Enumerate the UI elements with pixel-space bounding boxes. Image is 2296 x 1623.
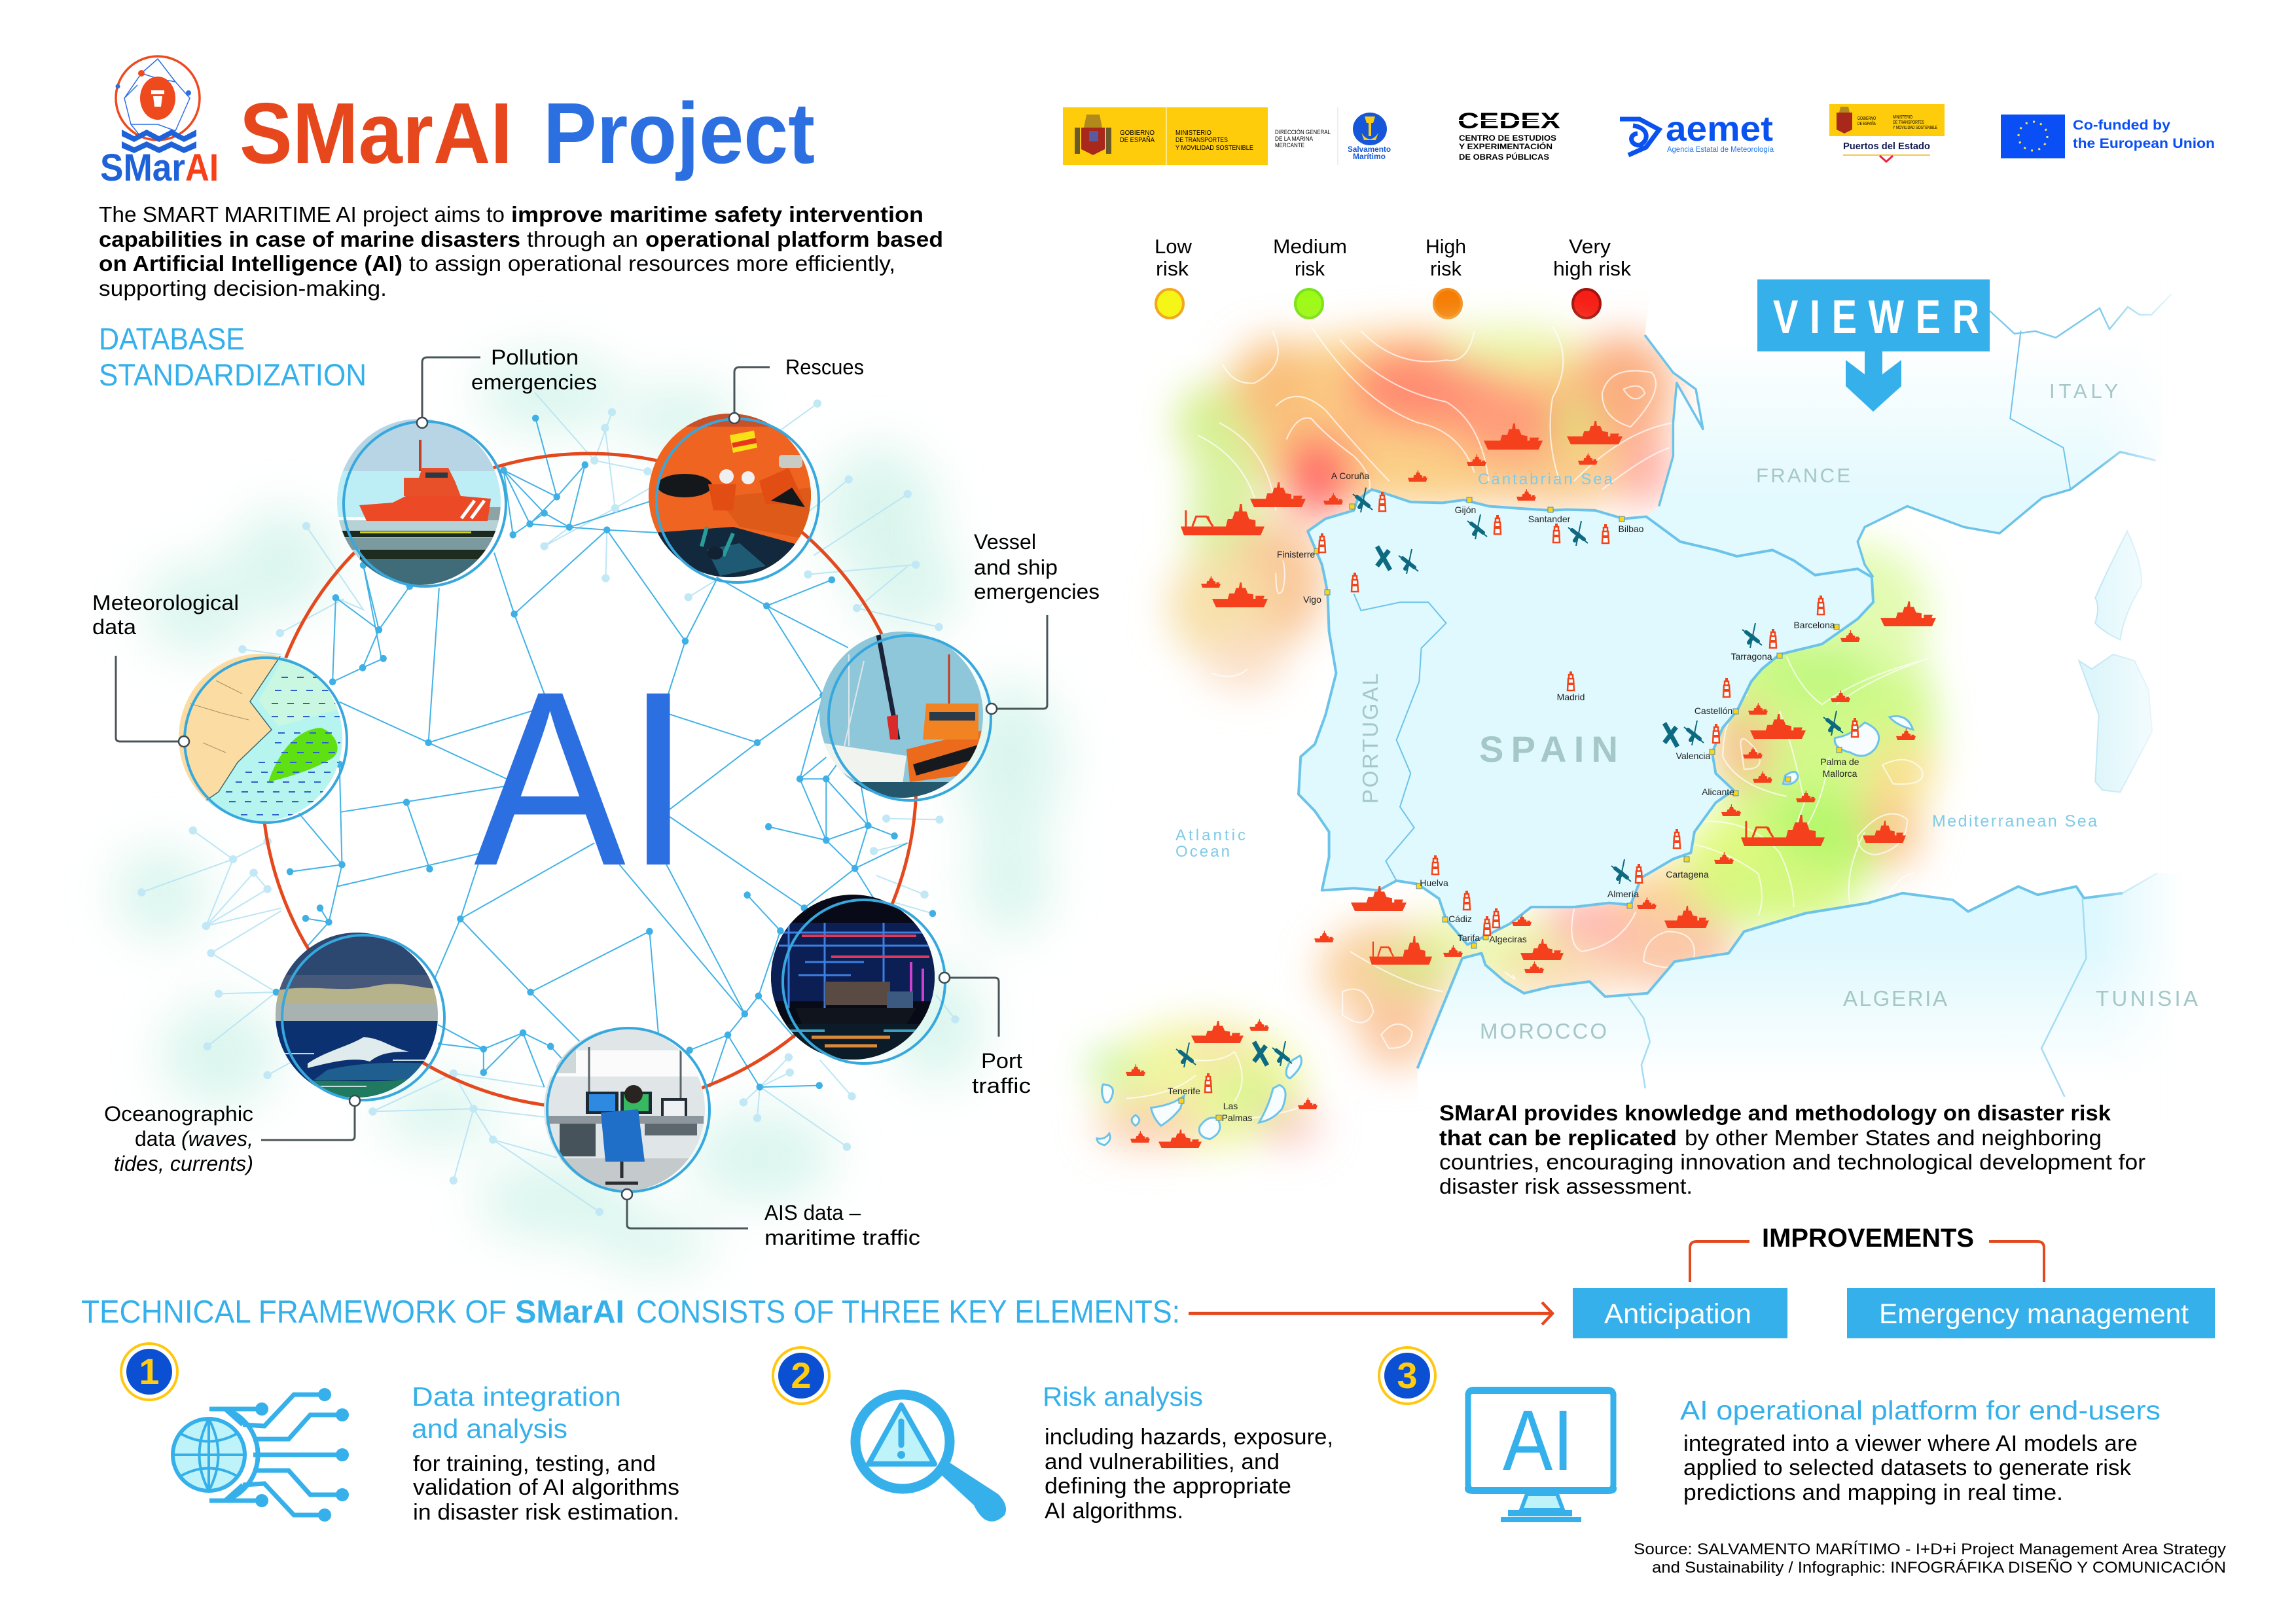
coordination centre towers (1205, 492, 1858, 1092)
badge 2 (773, 1347, 829, 1404)
text: AI operational platform: integrated into a viewer where AI models are (1683, 1431, 2138, 1456)
text: AI operational platform: AI operational platform for end-users (1680, 1395, 2161, 1425)
port markers and labels: Alicante (1702, 787, 1734, 797)
improvements heading with bracket: IMPROVEMENTS (1762, 1224, 1974, 1253)
badge 2: 2 (791, 1355, 812, 1396)
logo: Gobierno de España ministry: DE TRANSPORTES (1175, 137, 1228, 144)
viewer banner with arrow: VIEWER (1773, 291, 1979, 343)
logo: Gobierno de España ministry: MERCANTE (1275, 142, 1304, 149)
sea and country names: ALGERIA (1843, 986, 1947, 1010)
photo: rescues (645, 412, 819, 582)
risk legend: risk (1430, 257, 1462, 280)
logo: Puertos del Estado (1829, 104, 1945, 162)
source note (1634, 1541, 2226, 1577)
badge 1: 1 (139, 1351, 160, 1392)
logo: Gobierno de España ministry: DIRECCIÓN GENERAL (1275, 129, 1331, 135)
port markers and labels: Palma de (1820, 757, 1859, 767)
sea and country names: Atlantic (1175, 827, 1246, 844)
box: anticipation: Anticipation (1604, 1298, 1751, 1330)
heading: database standardization: STANDARDIZATION (99, 357, 367, 392)
leader: rescues: Rescues (785, 355, 864, 379)
text: risk analysis: including hazards, exposure, (1045, 1425, 1333, 1450)
rescue vessels (1126, 421, 1936, 1148)
leader: meteorological data (92, 591, 239, 747)
port markers and labels: A Coruña (1331, 471, 1369, 481)
leader: rescues (729, 355, 864, 423)
port markers and labels: Almería (1607, 889, 1639, 899)
leader: vessel and ship emergencies: emergencies (974, 580, 1100, 603)
sea and country names: FRANCE (1756, 464, 1850, 487)
background glow around network (115, 353, 1063, 1270)
port markers and labels: Tenerife (1168, 1086, 1200, 1096)
helicopters and planes (1176, 488, 1843, 1067)
intro paragraph: supporting decision-making. (99, 276, 387, 300)
leader: vessel and ship emergencies: Vessel (974, 530, 1036, 554)
port markers and labels: Palmas (1222, 1113, 1252, 1123)
text: risk analysis: Risk analysis (1043, 1382, 1203, 1412)
risk legend: High (1426, 235, 1466, 258)
port markers and labels: Las (1223, 1101, 1238, 1111)
framework heading: CONSISTS OF THREE KEY ELEMENTS: (636, 1294, 1180, 1330)
network diagram (137, 393, 960, 1216)
risk legend (1155, 235, 1632, 318)
title: Project (543, 85, 815, 181)
element 3: AI platform (1379, 1347, 2161, 1522)
sea and country names: Mediterranean Sea (1932, 812, 2097, 830)
source note: and Sustainability / Infographic: INFOGRÁFIKA DISEÑO Y COMUNICACIÓN (1652, 1559, 2226, 1577)
logo: EU co-funding: Co-funded by (2073, 118, 2170, 133)
logo: SMarAI emblem (100, 56, 219, 189)
leader: oceanographic data: Oceanographic (104, 1102, 253, 1126)
text: data integration: for training, testing, and (413, 1452, 656, 1476)
icon: magnifier with warning (855, 1395, 1006, 1522)
port markers and labels: Mallorca (1823, 768, 1857, 779)
logo: CEDEX: CEDEX (1458, 109, 1560, 134)
framework heading: SMarAI (515, 1294, 624, 1330)
text: data integration: validation of AI algorithms (413, 1475, 679, 1500)
central AI letters: I (624, 639, 693, 918)
sea and country names (1175, 380, 2198, 1043)
box: emergency management (1847, 1288, 2215, 1338)
photo: port traffic (766, 890, 945, 1067)
framework heading (81, 1294, 1180, 1330)
logo: Gobierno de España ministry: Y MOVILIDAD SOSTENIBLE (1175, 145, 1253, 152)
logo: Puertos del Estado: GOBIERNO (1857, 116, 1876, 121)
logo: SMarAI emblem: SMar (100, 147, 185, 189)
text: data integration: Data integration (412, 1382, 621, 1412)
improvements heading with bracket (1690, 1224, 2044, 1282)
replication paragraph: SMarAI provides knowledge and methodology on disaster risk (1439, 1101, 2111, 1125)
badge 1 (121, 1344, 177, 1400)
port markers and labels: Madrid (1557, 692, 1585, 702)
port markers and labels: Tarragona (1731, 651, 1772, 662)
logo strip (1063, 104, 2215, 165)
logo: CEDEX: DE OBRAS PÚBLICAS (1459, 152, 1549, 162)
text: AI operational platform (1680, 1395, 2161, 1505)
port markers and labels: Santander (1528, 514, 1571, 524)
viewer banner with arrow (1757, 279, 1990, 412)
port markers and labels: Tarifa (1458, 933, 1480, 943)
badge 3: 3 (1397, 1355, 1418, 1396)
logo: Salvamento Marítimo: Salvamento (1348, 145, 1391, 154)
port markers and labels: Finisterre (1277, 549, 1315, 560)
leader: pollution emergencies: Pollution (491, 346, 579, 369)
logo: CEDEX: Y EXPERIMENTACIÓN (1459, 141, 1552, 151)
text: data integration (412, 1382, 679, 1525)
source note: Source: SALVAMENTO MARÍTIMO - I+D+i Project Management Area Strategy (1634, 1541, 2226, 1558)
port markers and labels: Vigo (1303, 594, 1321, 605)
text: data integration: and analysis (412, 1414, 567, 1444)
replication paragraph: disaster risk assessment. (1439, 1174, 1693, 1198)
port markers and labels: Bilbao (1619, 524, 1644, 534)
logo: Puertos del Estado: MINISTERIO (1893, 115, 1912, 120)
box: anticipation (1573, 1288, 1787, 1338)
photo: oceanographic data (272, 929, 448, 1103)
risk heatmap (1088, 327, 1935, 1149)
sea and country names: TUNISIA (2096, 986, 2198, 1010)
logo: SMarAI emblem: AI (185, 147, 219, 189)
replication paragraph: that can be replicated (1439, 1126, 1677, 1150)
logo: EU co-funding (2001, 115, 2215, 158)
icon: globe with circuit lines (173, 1388, 349, 1522)
leader: AIS data: maritime traffic (764, 1226, 920, 1249)
text: risk analysis: AI algorithms. (1045, 1499, 1183, 1524)
sea and country names: Cantabrian Sea (1478, 471, 1613, 488)
orange ring connecting data sources (262, 454, 916, 1108)
risk legend: high risk (1553, 257, 1632, 280)
element 1: data integration (121, 1344, 679, 1525)
badge 3 (1379, 1347, 1435, 1404)
port markers and labels: Cádiz (1448, 914, 1472, 924)
intro paragraph: capabilities in case of marine disasters (99, 227, 520, 251)
photo: vessel and ship emergencies (815, 628, 992, 802)
logo: Salvamento Marítimo (1348, 113, 1391, 161)
text: risk analysis: defining the appropriate (1045, 1474, 1291, 1499)
intro paragraph: The SMART MARITIME AI project aims to (99, 202, 505, 226)
replication paragraph (1439, 1101, 2145, 1198)
risk legend: Medium (1273, 235, 1347, 258)
port markers and labels: Castellón (1695, 705, 1732, 716)
logo: Puertos del Estado: Puertos del Estado (1843, 141, 1930, 152)
intro paragraph: through an (527, 227, 638, 251)
risk legend: risk (1295, 257, 1325, 280)
logo: Gobierno de España ministry: GOBIERNO (1120, 130, 1155, 137)
leader: meteorological data: Meteorological (92, 591, 239, 615)
text: risk analysis (1043, 1382, 1333, 1524)
icon: monitor with AI (1465, 1387, 1617, 1522)
photo: pollution emergencies (334, 416, 511, 592)
leader: vessel and ship emergencies: and ship (974, 556, 1058, 579)
port markers and labels: Gijón (1455, 505, 1476, 515)
logo: AEMET: Agencia Estatal de Meteorología (1667, 145, 1774, 154)
leader: port traffic (939, 972, 1031, 1097)
heading: database standardization: DATABASE (99, 321, 245, 356)
port markers and labels: Valencia (1676, 751, 1711, 761)
logo: Gobierno de España ministry: MINISTERIO (1175, 130, 1211, 137)
replication paragraph: by other Member States and neighboring (1685, 1126, 2102, 1150)
leader: port traffic: traffic (972, 1074, 1031, 1097)
logo: Gobierno de España ministry (1063, 107, 1338, 165)
leader: AIS data (622, 1189, 920, 1249)
land: France and Italy (1645, 281, 2172, 793)
port markers and labels: Algeciras (1489, 934, 1527, 944)
logo: Puertos del Estado: DE TRANSPORTES (1893, 120, 1924, 125)
risk legend: risk (1156, 257, 1189, 280)
sea and country names: PORTUGAL (1358, 673, 1382, 804)
framework heading: TECHNICAL FRAMEWORK OF (81, 1294, 507, 1330)
land: North Africa (1097, 873, 2296, 1145)
element 2: risk analysis (773, 1347, 1333, 1524)
risk legend: Low (1155, 235, 1193, 258)
heatmap contour lines (1126, 327, 1929, 1118)
leader: AIS data: AIS data – (764, 1201, 861, 1224)
sea and country names: MOROCCO (1480, 1019, 1607, 1043)
intro paragraph (99, 202, 943, 300)
intro paragraph: improve maritime safety intervention (511, 202, 924, 226)
logo: Gobierno de España ministry: DE LA MARINA (1275, 135, 1313, 142)
photo: AIS data control room (540, 1024, 710, 1194)
land: Iberian Peninsula (1299, 490, 1913, 944)
central AI letters: A (474, 639, 627, 918)
port markers and labels: Cartagena (1666, 869, 1709, 880)
port markers and labels: Huelva (1420, 878, 1448, 888)
leader: vessel and ship emergencies (974, 530, 1100, 714)
logo: CEDEX: CENTRO DE ESTUDIOS (1459, 134, 1556, 143)
logo: CEDEX (1458, 109, 1560, 162)
sea and country names: ITALY (2049, 380, 2118, 402)
leader: oceanographic data (104, 1096, 360, 1175)
leader: meteorological data: data (92, 615, 136, 639)
logo: AEMET (1620, 109, 1774, 155)
arrow to improvements (1189, 1302, 1552, 1325)
text: data integration: in disaster risk estimation. (413, 1500, 679, 1525)
heading: database standardization (99, 321, 367, 392)
box: emergency management: Emergency management (1879, 1298, 2189, 1330)
logo: Salvamento Marítimo: Marítimo (1353, 152, 1386, 161)
leader: pollution emergencies: emergencies (471, 370, 597, 394)
text: risk analysis: and vulnerabilities, and (1045, 1450, 1280, 1474)
port markers and labels: Barcelona (1793, 620, 1835, 630)
map: risk viewer (1088, 281, 2296, 1149)
leader: oceanographic data: tides, currents) (114, 1152, 253, 1175)
risk legend: Very (1569, 235, 1611, 258)
text: AI operational platform: applied to selected datasets to generate risk (1683, 1455, 2132, 1480)
sea and country names: Ocean (1175, 843, 1230, 861)
logo: Puertos del Estado: Y MOVILIDAD SOSTENIBLE (1893, 126, 1937, 130)
leader: port traffic: Port (981, 1049, 1022, 1073)
text: AI operational platform: predictions and mapping in real time. (1683, 1480, 2063, 1505)
logo: EU co-funding: the European Union (2073, 136, 2215, 151)
fade at right edge of map (2094, 281, 2186, 1119)
intro paragraph: operational platform based (645, 227, 943, 251)
leader: pollution emergencies (417, 346, 597, 428)
intro paragraph: on Artificial Intelligence (AI) (99, 251, 403, 276)
logo: Puertos del Estado: DE ESPAÑA (1857, 120, 1876, 126)
photo: meteorological data map (177, 651, 347, 826)
leader: oceanographic data: data (waves, (135, 1127, 253, 1150)
logo: AEMET: aemet (1666, 109, 1773, 149)
title: SMarAI (240, 85, 512, 181)
sea and country names: SPAIN (1479, 728, 1618, 770)
logo: Gobierno de España ministry: DE ESPAÑA (1120, 135, 1155, 144)
port markers and labels (1168, 471, 1859, 1123)
replication paragraph: countries, encouraging innovation and technological development for (1439, 1150, 2145, 1174)
icon: monitor with AI: AI (1503, 1392, 1573, 1488)
title (240, 85, 815, 181)
intro paragraph: to assign operational resources more efficiently, (409, 251, 895, 276)
